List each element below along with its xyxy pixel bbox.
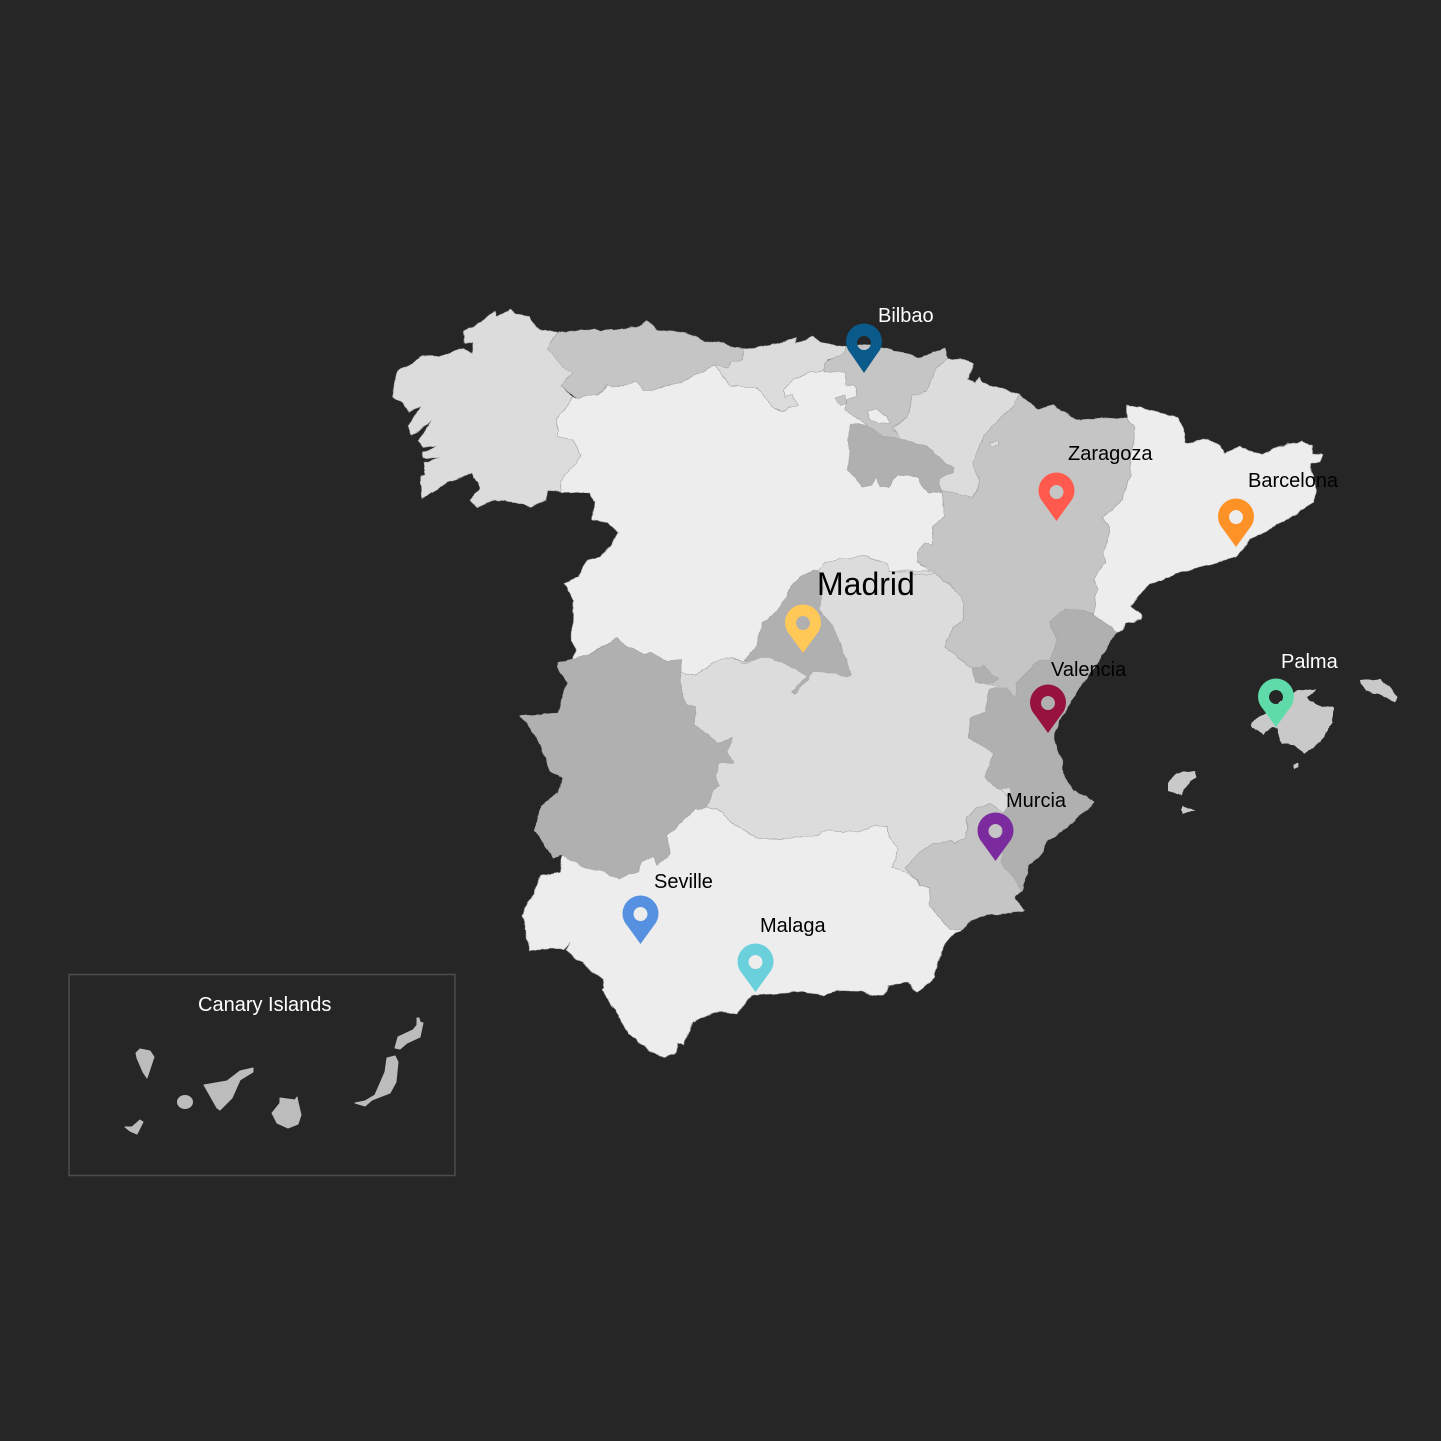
region: Andalusia (522, 807, 963, 1058)
label: Zaragoza: Zaragoza (1068, 443, 1153, 465)
island: Tenerife (204, 1068, 253, 1110)
map of Spain (392, 308, 1397, 1058)
pin: Malaga (738, 944, 773, 992)
region: Navarra (895, 358, 1020, 497)
label: Bilbao: Bilbao (878, 305, 934, 327)
region: Galicia (392, 308, 580, 507)
inset title: Canary Islands (198, 994, 331, 1016)
region: Castilla-La Mancha (680, 556, 1012, 872)
pin: Bilbao (846, 324, 882, 373)
region: Madrid (742, 570, 852, 693)
label: Palma: Palma (1281, 651, 1339, 673)
pin: Zaragoza (1038, 473, 1074, 521)
islands: Balearic (1168, 678, 1397, 814)
label: Malaga: Malaga (760, 915, 826, 937)
island: El Hierro (125, 1120, 143, 1134)
label: Barcelona: Barcelona (1248, 470, 1339, 492)
island: Lanzarote (395, 1018, 423, 1049)
region: Aragon (918, 394, 1135, 697)
pin: Murcia (978, 813, 1014, 861)
region: Murcia (905, 803, 1025, 930)
pin: Barcelona (1218, 499, 1254, 547)
region: Cantabria (713, 336, 847, 412)
pin: Palma (1258, 679, 1294, 727)
region: Basque Country (823, 344, 948, 437)
island: Gran Canaria (272, 1097, 301, 1128)
label: Murcia: Murcia (1006, 790, 1067, 812)
region: Valencia (967, 608, 1117, 890)
island: La Gomera (178, 1096, 192, 1108)
region: Asturias (548, 321, 745, 398)
island: Fuerteventura (355, 1056, 398, 1106)
label: Madrid: Madrid (817, 566, 915, 602)
region: La Rioja (848, 424, 953, 493)
region: Catalonia (1092, 404, 1323, 632)
panel: Canary Islands inset (69, 974, 455, 1176)
pin: Madrid (785, 605, 821, 653)
label: Valencia: Valencia (1051, 659, 1127, 681)
pin: Valencia (1030, 685, 1066, 733)
pin: Seville (623, 896, 658, 944)
label: Seville: Seville (654, 871, 713, 893)
region: Castilla y Leon (557, 365, 945, 675)
region: Extremadura (520, 638, 733, 879)
island: La Palma (136, 1049, 154, 1078)
